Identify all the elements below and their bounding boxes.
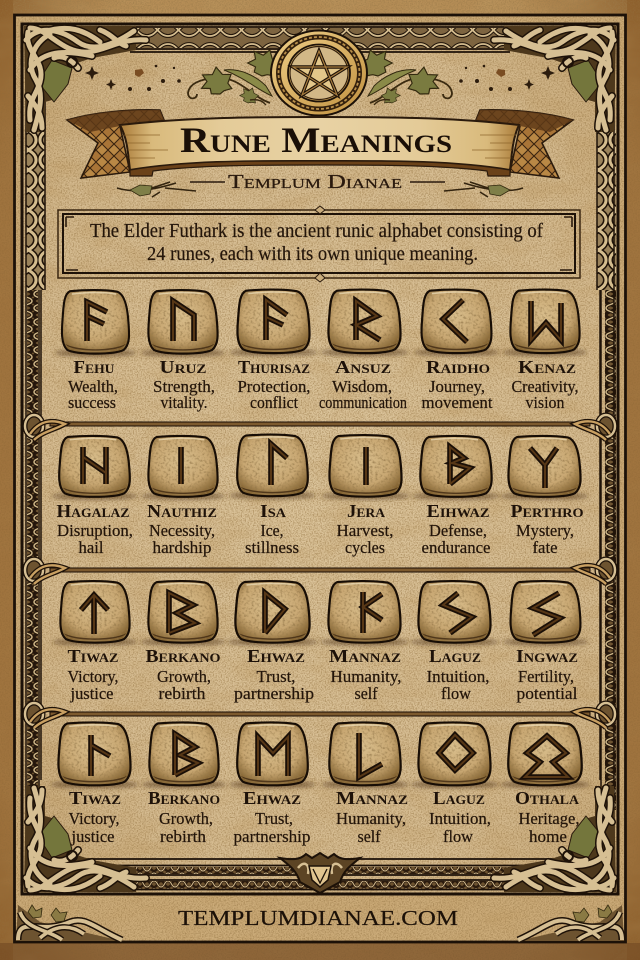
rune meaning: Trust, bbox=[255, 809, 293, 828]
rune stone bbox=[320, 290, 409, 356]
rune card: Berkano (row 4) bbox=[141, 722, 227, 846]
rune meaning: Wealth, bbox=[68, 377, 118, 396]
subtitle: Templum Dianae bbox=[228, 171, 402, 193]
rune meaning: conflict bbox=[250, 393, 298, 412]
rune stone bbox=[502, 290, 588, 356]
rune meaning: Victory, bbox=[68, 809, 120, 828]
rune name: Tiwaz bbox=[69, 788, 121, 808]
rune meaning bbox=[426, 667, 490, 703]
decorative stars and specks bbox=[85, 65, 555, 91]
rune meaning bbox=[512, 377, 578, 412]
row dividers with knots bbox=[25, 415, 615, 728]
corners bbox=[24, 26, 146, 132]
rune meaning: Victory, bbox=[68, 667, 118, 686]
rune stone bbox=[54, 290, 137, 356]
rune card: Tiwaz (row 3) bbox=[52, 581, 138, 703]
rune card: Isa bbox=[229, 435, 316, 557]
rune name: Ehwaz bbox=[247, 646, 305, 666]
rune stone bbox=[229, 722, 316, 788]
rune meaning: Humanity, bbox=[330, 667, 402, 686]
rune name: Berkano bbox=[146, 646, 220, 666]
rune card: Ehwaz (row 3) bbox=[227, 581, 318, 703]
top band bbox=[136, 28, 504, 48]
rune meaning: success bbox=[68, 393, 116, 412]
foliage right of pentacle bbox=[360, 50, 452, 105]
rune meaning: endurance bbox=[422, 538, 490, 557]
icon: pentacle medallion bbox=[271, 30, 367, 116]
rune name: Ingwaz bbox=[516, 646, 578, 666]
rune meaning: Heritage, bbox=[518, 809, 580, 828]
rune name: Eihwaz bbox=[426, 501, 490, 521]
rune meaning bbox=[336, 521, 394, 557]
rune meaning: Disruption, bbox=[57, 521, 133, 540]
rune card: Eihwaz bbox=[412, 436, 500, 557]
rune meaning bbox=[429, 809, 491, 846]
rune stone bbox=[413, 290, 500, 356]
rune meaning: movement bbox=[422, 393, 493, 412]
rune name: Thurisaz bbox=[238, 357, 310, 377]
rune stone bbox=[140, 581, 226, 645]
rune meaning bbox=[516, 667, 578, 703]
rune meaning bbox=[157, 667, 211, 703]
rune meaning bbox=[422, 521, 490, 557]
rune card: Fehu bbox=[54, 290, 137, 412]
rune meaning bbox=[238, 377, 310, 412]
rune meaning bbox=[234, 667, 314, 703]
rune stone bbox=[227, 581, 318, 645]
rune card: Raidho bbox=[413, 290, 500, 412]
rune card: Laguz (row 3) bbox=[410, 581, 499, 703]
rune card: Kenaz bbox=[502, 290, 588, 412]
rune stone bbox=[500, 436, 589, 499]
ribbon right tail bbox=[476, 110, 573, 178]
rune stone bbox=[321, 435, 410, 499]
rune meaning: Necessity, bbox=[149, 521, 215, 540]
rune name: Uruz bbox=[160, 357, 207, 377]
rune meaning bbox=[516, 521, 574, 557]
rune meaning: Fertility, bbox=[518, 667, 574, 686]
rune name: Mannaz bbox=[336, 788, 408, 808]
title ribbon bbox=[67, 110, 573, 178]
rune meaning: Intuition, bbox=[426, 667, 490, 686]
rune meaning: flow bbox=[441, 684, 471, 703]
rune name: Berkano bbox=[148, 788, 220, 808]
rune meaning: fate bbox=[532, 538, 558, 557]
rune meaning: Intuition, bbox=[429, 809, 491, 828]
rune card: Nauthiz bbox=[140, 436, 226, 557]
rune meaning: Harvest, bbox=[336, 521, 394, 540]
rune meaning: Protection, bbox=[238, 377, 310, 396]
rune name: Ehwaz bbox=[243, 788, 301, 808]
rune card: Jera bbox=[321, 435, 410, 557]
rune meaning: rebirth bbox=[158, 684, 206, 703]
rune stone bbox=[502, 581, 589, 645]
rune name: Raidho bbox=[426, 357, 490, 377]
rune meaning: home bbox=[529, 827, 567, 846]
rune card: Mannaz (row 4) bbox=[321, 722, 409, 846]
rune meaning bbox=[330, 667, 402, 703]
rune meaning bbox=[153, 377, 215, 412]
rune meaning: self bbox=[354, 684, 378, 703]
rune name: Nauthiz bbox=[147, 501, 217, 521]
rune name: Othala bbox=[515, 788, 580, 808]
rune meaning: partnership bbox=[234, 827, 310, 846]
rune stone bbox=[500, 722, 590, 788]
bottom band bbox=[62, 859, 578, 890]
rune meaning bbox=[159, 809, 213, 846]
rune meaning bbox=[319, 377, 407, 412]
rune name: Hagalaz bbox=[56, 501, 130, 521]
rune meaning: rebirth bbox=[160, 827, 207, 846]
rune name: Ansuz bbox=[335, 357, 391, 377]
rune card: Perthro bbox=[500, 436, 589, 557]
rune meaning: Wisdom, bbox=[332, 377, 392, 396]
rune meaning: Trust, bbox=[256, 667, 296, 686]
bottom centre medallion bbox=[280, 853, 360, 893]
rune meaning: Growth, bbox=[159, 809, 213, 828]
rune card: Ingwaz bbox=[502, 581, 589, 703]
rune stone bbox=[140, 290, 226, 356]
rune stone bbox=[50, 722, 139, 788]
rune stone bbox=[229, 290, 318, 356]
rune stone bbox=[410, 722, 499, 788]
rune meaning bbox=[422, 377, 493, 412]
rune meaning bbox=[68, 809, 120, 846]
rune name: Tiwaz bbox=[68, 646, 119, 666]
rune meaning bbox=[57, 521, 133, 557]
rune meaning: flow bbox=[443, 827, 473, 846]
intro panel bbox=[58, 206, 580, 282]
rune name: Mannaz bbox=[329, 646, 401, 666]
rune name: Isa bbox=[260, 501, 287, 521]
ribbon banner bbox=[120, 117, 519, 170]
subtitle flourishes bbox=[117, 182, 523, 197]
rune meaning: communication bbox=[319, 393, 407, 412]
rune card: Ehwaz (row 4) bbox=[229, 722, 316, 846]
foliage left of pentacle bbox=[188, 50, 280, 105]
rune card: Berkano (row 3) bbox=[140, 581, 226, 703]
rune stone bbox=[412, 436, 500, 499]
rune meaning: Creativity, bbox=[512, 377, 578, 396]
rune meaning: Journey, bbox=[429, 377, 485, 396]
rune meaning: potential bbox=[516, 684, 578, 703]
rune card: Othala bbox=[500, 722, 590, 846]
rune meaning bbox=[336, 809, 406, 846]
rune card: Hagalaz bbox=[51, 436, 138, 557]
rune meaning: cycles bbox=[345, 538, 385, 557]
rune meaning: hail bbox=[78, 538, 104, 557]
rune stone bbox=[320, 581, 409, 645]
rune card: Mannaz (row 3) bbox=[320, 581, 409, 703]
rune meaning bbox=[234, 809, 310, 846]
rune meaning: hardship bbox=[152, 538, 212, 557]
rune meaning bbox=[245, 521, 299, 557]
rune meaning bbox=[68, 667, 118, 703]
rune name: Jera bbox=[347, 501, 386, 521]
rune meaning: vision bbox=[526, 393, 564, 412]
rune card: Ansuz bbox=[319, 290, 409, 412]
rune stone bbox=[410, 581, 499, 645]
rune name: Laguz bbox=[429, 646, 481, 666]
ribbon left tail bbox=[67, 110, 164, 178]
rune meaning: stillness bbox=[245, 538, 299, 557]
rune meaning: justice bbox=[71, 827, 114, 846]
rune meaning: Growth, bbox=[157, 667, 211, 686]
rune card: Thurisaz bbox=[229, 290, 318, 412]
intro text: The Elder Futhark is the ancient runic alphabet consisting of bbox=[90, 221, 543, 242]
rune name: Perthro bbox=[510, 501, 584, 521]
rune meaning: justice bbox=[70, 684, 114, 703]
rune meaning bbox=[68, 377, 118, 412]
rune name: Kenaz bbox=[518, 357, 576, 377]
decorative side braids bbox=[27, 290, 38, 810]
rune card: Tiwaz (row 4) bbox=[50, 722, 139, 846]
rune meaning: self bbox=[358, 827, 381, 846]
rune meaning bbox=[149, 521, 215, 557]
website footer: TEMPLUMDIANAE.COM bbox=[178, 906, 458, 930]
rune meaning: Mystery, bbox=[516, 521, 574, 540]
rune meaning: Strength, bbox=[153, 377, 215, 396]
rune meaning: partnership bbox=[234, 684, 314, 703]
rune name: Fehu bbox=[74, 357, 115, 377]
rune meaning bbox=[518, 809, 580, 846]
rune name: Laguz bbox=[433, 788, 485, 808]
rune meaning: Humanity, bbox=[336, 809, 406, 828]
intro panel: 24 runes, each with its own unique meaning. bbox=[147, 244, 478, 265]
rune stone bbox=[52, 581, 138, 645]
rune meaning: Defense, bbox=[429, 521, 487, 540]
rune card: Laguz (row 4) bbox=[410, 722, 499, 846]
rune stone bbox=[321, 722, 409, 788]
rune stone bbox=[140, 436, 226, 499]
title: Rune Meanings bbox=[180, 120, 452, 160]
rune meaning: vitality. bbox=[160, 393, 208, 412]
rune meaning: Ice, bbox=[260, 521, 284, 540]
rune stone bbox=[51, 436, 138, 499]
rune card: Uruz bbox=[140, 290, 226, 412]
rune stone bbox=[229, 435, 316, 499]
rune stone bbox=[141, 722, 227, 788]
